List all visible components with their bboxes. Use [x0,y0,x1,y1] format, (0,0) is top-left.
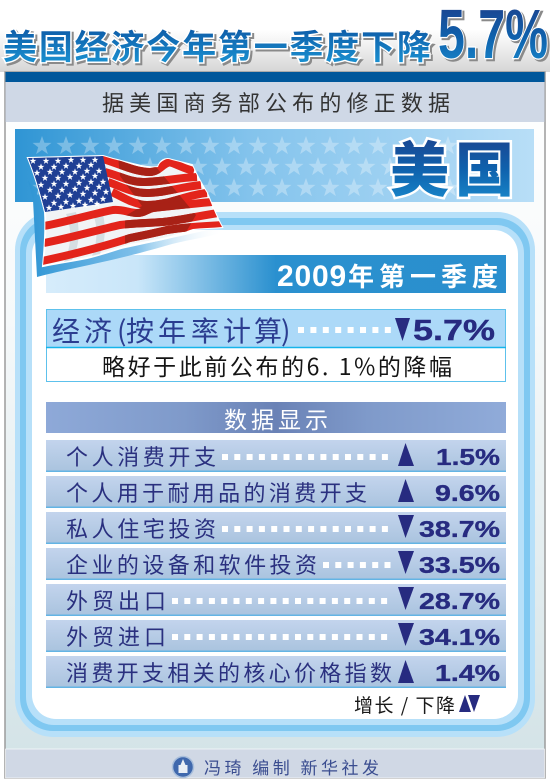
banner with stars [15,129,534,202]
row: personal consumption: 1.5% [436,444,500,470]
title backdrop [0,30,550,72]
stripes [42,158,224,261]
subtitle: 据美国商务部公布的修正数据 [102,86,450,118]
flag shadow [28,180,225,277]
row: core price index: 消费开支相关的核心价格指数 [66,656,392,688]
row: imports: 外贸进口 [66,620,166,652]
note: 略好于此前公布的6. 1%的降幅 [102,348,452,382]
rounded panel frame [15,212,535,737]
row: personal consumption: 个人消费开支 [66,440,216,472]
row: durable goods: 9.6% [435,480,500,506]
data heading: 数据显示 [224,401,328,435]
footer logo [172,756,194,778]
row: durable goods [46,476,506,508]
title: 美国经济今年第一季度下降 [3,20,431,69]
row: exports: 外贸出口 [66,584,166,616]
banner label: 美国: 美国 [390,123,514,208]
row: durable goods: 个人用于耐用品的消费开支 [66,476,367,508]
row: personal consumption [46,440,506,472]
year bar [46,255,506,294]
row: equipment and software: 33.5% [419,552,500,578]
row: residential investment: 私人住宅投资 [66,512,216,544]
row: residential investment: 38.7% [419,516,500,542]
row: exports: 28.7% [419,588,500,614]
economy value: 5.7% [413,315,495,347]
year bar: 年第一季度 [348,257,498,294]
flag canton [28,156,113,212]
dotted leader [298,327,391,333]
header bar [6,72,544,82]
row: exports [46,584,506,616]
footer band [6,749,544,778]
icon: waving US flag [28,156,225,277]
icon: down arrow [395,318,410,341]
row: equipment and software: 企业的设备和软件投资 [66,548,317,580]
data heading [46,401,506,435]
row: residential investment [46,512,506,544]
subtitle band [6,82,544,122]
row: imports [46,620,506,652]
row: imports: 34.1% [419,624,500,650]
row: equipment and software [46,548,506,580]
footer credit: 冯琦 编制 新华社发 [204,754,379,779]
legend: 增长 / 下降 [354,691,455,718]
economy summary box [46,310,506,382]
year bar: 2009 [277,260,346,293]
row: core price index: 1.4% [435,660,500,686]
economy label: 经济(按年率计算) [52,310,290,350]
